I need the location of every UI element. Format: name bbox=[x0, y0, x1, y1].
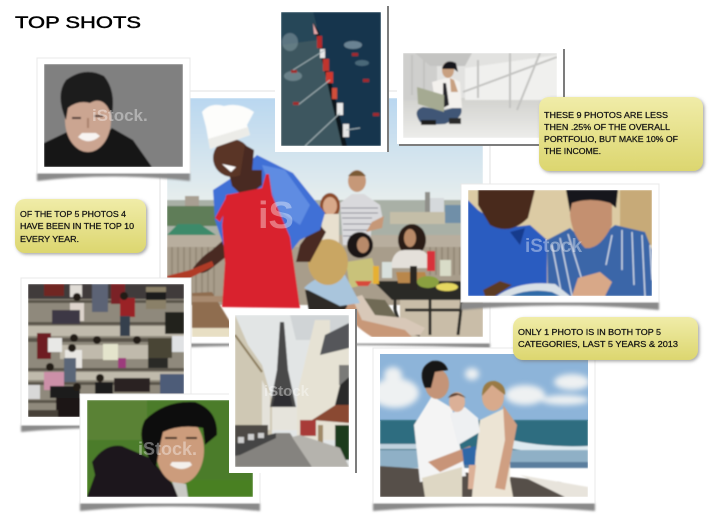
callout: only 1 photo: ONLY 1 PHOTO IS IN BOTH TOP 5 bbox=[518, 328, 661, 337]
photo: Asian man on green bbox=[80, 394, 260, 511]
photo: Asian man on green: iStock. bbox=[138, 439, 197, 459]
photo: Eiffel Tower street bbox=[229, 309, 357, 473]
callout: less than .25% of portfolio: THE INCOME. bbox=[544, 147, 601, 156]
title: TOP SHOTS bbox=[15, 13, 141, 32]
callout: top 5 photos: EVERY YEAR. bbox=[20, 235, 79, 244]
photo: two men reading bbox=[461, 184, 659, 310]
photo: crowd on steps bbox=[21, 278, 191, 432]
callout: only 1 photo bbox=[513, 317, 698, 360]
photo: businessman with laptop in corridor bbox=[397, 47, 565, 146]
photo: barbecue party bbox=[160, 91, 490, 348]
callout: top 5 photos: OF THE TOP 5 PHOTOS 4 bbox=[20, 210, 126, 219]
photo: Eiffel Tower street: iStock bbox=[264, 383, 310, 400]
callout: less than .25% of portfolio: PORTFOLIO, BUT MAKE 10% OF bbox=[544, 135, 678, 144]
photo: rowing crew from above bbox=[275, 6, 389, 152]
photo: family on the beach bbox=[371, 348, 595, 511]
photo: smiling young man on grey: iStock. bbox=[92, 106, 148, 125]
callout: less than .25% of portfolio bbox=[539, 97, 703, 171]
callout: top 5 photos: HAVE BEEN IN THE TOP 10 bbox=[20, 222, 134, 231]
chef bbox=[193, 236, 232, 273]
callout: only 1 photo: CATEGORIES, LAST 5 YEARS & 2013 bbox=[518, 340, 678, 349]
photo: smiling young man on grey bbox=[37, 58, 190, 181]
photo: barbecue party: iS bbox=[258, 195, 294, 237]
photo: two men reading: iStock bbox=[525, 236, 582, 257]
callout: top 5 photos bbox=[15, 199, 146, 253]
callout: less than .25% of portfolio: THEN .25% OF THE OVERALL bbox=[544, 123, 670, 132]
callout: less than .25% of portfolio: THESE 9 PHOTOS ARE LESS bbox=[544, 111, 669, 120]
